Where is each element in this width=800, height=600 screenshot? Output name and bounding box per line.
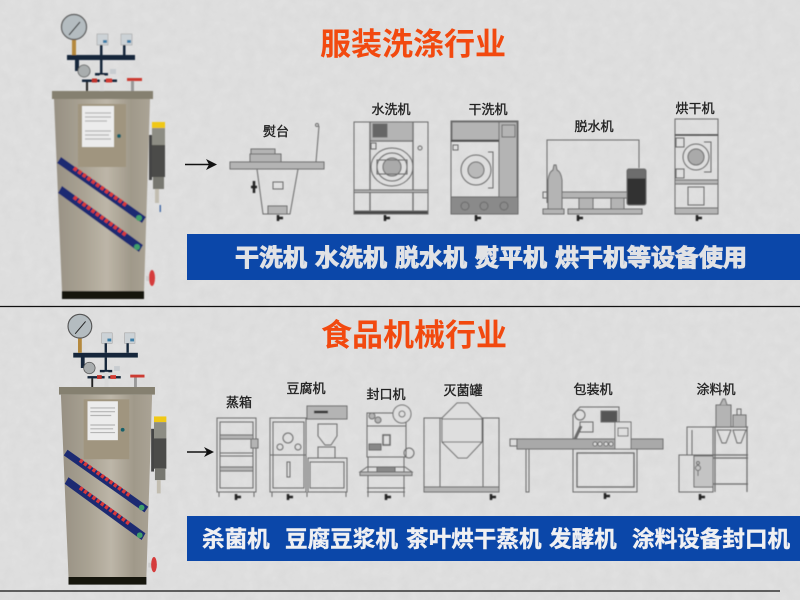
banner: garment equipment list: 干洗机: [235, 245, 307, 272]
icon: dry cleaner: [451, 121, 518, 221]
banner: garment equipment list: 水洗机: [315, 245, 387, 272]
banner: garment equipment list: 熨平机: [475, 245, 547, 272]
label: coating machine: 涂料机: [696, 382, 736, 397]
pipework and gauges: [68, 314, 144, 387]
label: tofu machine: 豆腐机: [286, 381, 326, 396]
icon: steam cabinet: [217, 418, 258, 500]
banner: food equipment list: 茶叶烘干蒸机: [406, 527, 542, 552]
icon: spin extractor: [543, 140, 646, 221]
banner: garment equipment list: 脱水机: [395, 245, 467, 272]
label: packaging machine: 包装机: [573, 382, 613, 397]
icon: packaging machine: [510, 407, 663, 499]
diagonal label bands: [57, 157, 146, 252]
boiler: bottom row: [59, 314, 166, 585]
tank body: [59, 387, 155, 585]
drain valve: [148, 557, 157, 572]
banner: garment equipment list: 烘干机等设备使用: [555, 245, 747, 272]
label: sterilizing tank: 灭菌罐: [443, 383, 483, 398]
label: tumble dryer: 烘干机: [675, 101, 715, 116]
icon: ironing table: [230, 124, 324, 221]
icon: sealing machine: [360, 405, 414, 500]
icon: tumble dryer: [675, 119, 718, 221]
banner: garment equipment list: [187, 234, 800, 280]
tank body: [52, 91, 153, 299]
icon: sterilizing tank: [424, 403, 499, 500]
banner: food equipment list: 涂料设备封口机: [632, 526, 791, 552]
diagonal label bands: [64, 450, 148, 540]
divider: top: [0, 306, 800, 308]
icon: coating machine: [679, 399, 748, 500]
label: steam cabinet: 蒸箱: [226, 395, 252, 410]
banner: food equipment list: 豆腐豆浆机: [285, 527, 398, 552]
arrow: bottom row: [187, 447, 214, 457]
title: garment laundry: 服装洗涤行业: [320, 27, 506, 62]
safety valve: [149, 122, 165, 212]
label: dry cleaner: 干洗机: [468, 102, 508, 117]
control panel: [84, 399, 129, 459]
pipework and gauges: [62, 14, 142, 91]
label: ironing table: 熨台: [263, 124, 289, 139]
control panel: [78, 104, 126, 167]
boiler: top row: [52, 14, 165, 299]
banner: food equipment list: [187, 516, 800, 561]
icon: tofu machine: [270, 406, 347, 500]
banner: food equipment list: 发酵机: [549, 527, 617, 552]
divider: bottom: [0, 590, 780, 592]
safety valve: [151, 416, 166, 493]
title: food machinery: 食品机械行业: [321, 318, 507, 353]
label: sealing machine: 封口机: [366, 387, 406, 402]
label: spin extractor: 脱水机: [574, 119, 614, 134]
icon: washer: [354, 122, 428, 221]
banner: food equipment list: 杀菌机: [202, 527, 270, 552]
arrow: top row: [185, 159, 217, 170]
drain valve: [146, 270, 155, 286]
label: washer: 水洗机: [371, 102, 411, 117]
